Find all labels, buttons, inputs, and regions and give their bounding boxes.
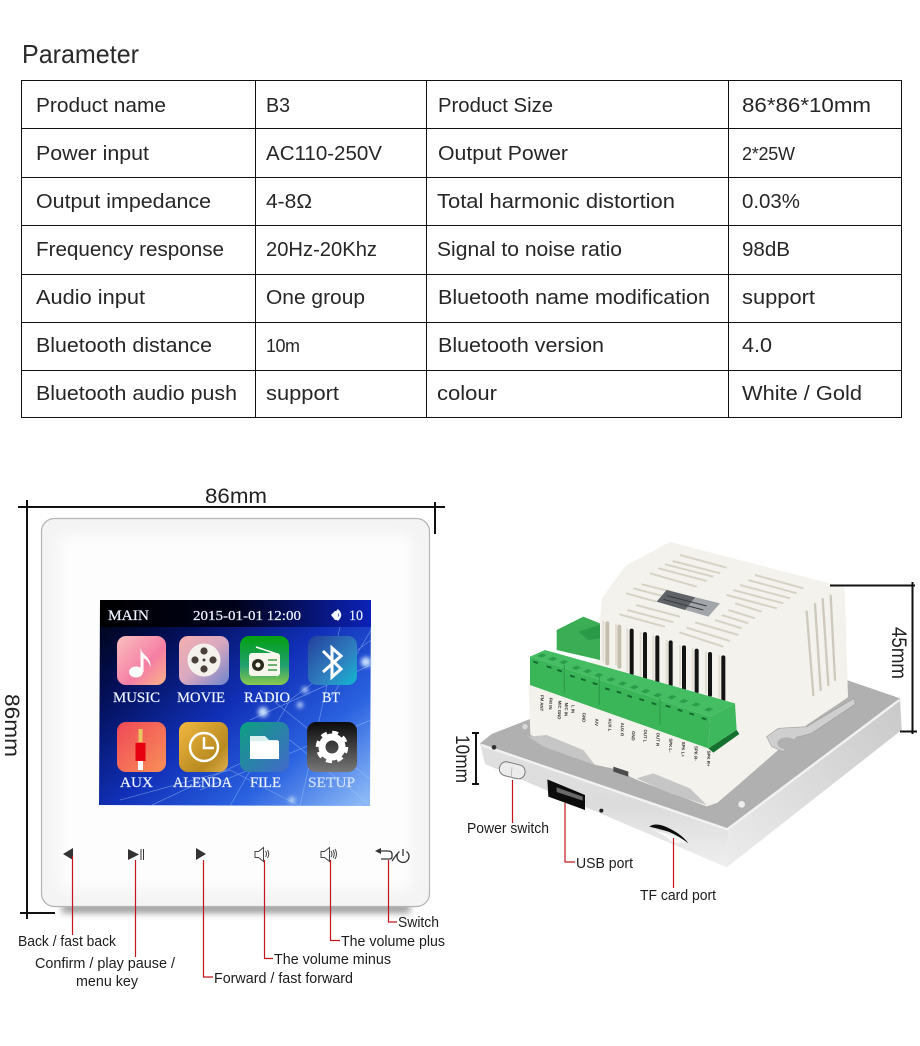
top vent slots: [619, 555, 803, 647]
row: bluetooth distance: Bluetooth version: [438, 335, 604, 357]
parameter table: [22, 80, 902, 418]
icon: music: [117, 636, 166, 685]
row: bluetooth audio push: colour: [437, 383, 497, 405]
label: calendar: ALENDA: [173, 775, 232, 791]
white housing: [530, 543, 847, 805]
side vent gaps: [607, 623, 723, 700]
row: bluetooth audio push: [36, 383, 862, 405]
row: audio input: Audio input: [36, 287, 145, 309]
label: radio: RADIO: [244, 690, 290, 706]
callout: confirm / play pause: Confirm / play pause /: [35, 955, 176, 972]
row: frequency response: [36, 239, 790, 261]
row: product name: B3: [266, 95, 290, 117]
row: product name: [36, 95, 871, 117]
row: power input: Power input: [36, 143, 149, 165]
row: power input: 2*25W: [742, 144, 795, 164]
label: setup: SETUP: [308, 775, 355, 791]
callout: the volume minus: [264, 860, 391, 968]
callout: confirm / play pause: menu key: [76, 973, 138, 990]
terminal labels: MIC GND: [557, 701, 562, 720]
row: output impedance: Total harmonic distortion: [437, 191, 675, 213]
screen: [99, 600, 371, 806]
icon: calendar: [179, 722, 228, 772]
terminal labels: GND: [631, 731, 636, 741]
row: product name: Product name: [36, 95, 166, 117]
dimension: 86mm height: 86mm: [0, 694, 23, 757]
icon: setup: [307, 722, 357, 772]
row: frequency response: 98dB: [742, 239, 790, 261]
terminal labels: L IN: [570, 705, 576, 713]
callout: back / fast back: [18, 856, 116, 950]
flange pieces: [528, 698, 855, 805]
row: bluetooth distance: Bluetooth distance: [36, 335, 212, 357]
panel: front view of device: [42, 518, 430, 913]
row: bluetooth distance: 4.0: [742, 335, 772, 357]
silver base plate: [480, 680, 902, 867]
tf card slot: [649, 825, 688, 843]
white front plate: [42, 518, 430, 906]
indicator hole: [599, 809, 603, 813]
row: frequency response: 20Hz-20Khz: [266, 239, 377, 261]
right vents: [807, 596, 835, 695]
terminal labels: [539, 695, 711, 767]
terminal labels: AUX L: [607, 718, 613, 732]
callout: confirm / play pause: [35, 860, 176, 990]
row: audio input: support: [742, 287, 815, 309]
row: bluetooth audio push: Bluetooth audio push: [36, 383, 237, 405]
dimension: 86mm width: [18, 485, 445, 534]
icon: volume plus: [321, 848, 336, 862]
icon: volume minus: [255, 848, 269, 862]
row: output impedance: 0.03%: [742, 191, 800, 213]
terminal labels: OUT R: [655, 733, 661, 747]
terminal labels: SPK R-: [693, 746, 699, 761]
terminal labels: MIC IN: [564, 703, 569, 716]
terminal labels: FM ANT: [539, 695, 545, 712]
row: frequency response: Signal to noise ratio: [437, 239, 622, 261]
large green terminal: [557, 617, 600, 660]
terminal front pockets: [533, 661, 706, 720]
label: music: MUSIC: [113, 690, 160, 706]
row: output impedance: Output impedance: [36, 191, 211, 213]
callout: the volume plus: [330, 860, 445, 950]
row: audio input: Bluetooth name modification: [438, 287, 710, 309]
dimension: 45mm height: [830, 582, 917, 734]
terminal labels: SPK L+: [680, 742, 686, 758]
callout: tf card port: TF card port: [640, 887, 717, 904]
row: power input: AC110-250V: [266, 143, 383, 165]
icon: radio: [240, 636, 289, 685]
dimension: 10mm depth: [451, 733, 479, 784]
icon: forward: [196, 848, 206, 860]
fin shading: [603, 621, 719, 698]
device shadow: [62, 904, 410, 913]
callout: forward / fast forward: Forward / fast forward: [214, 970, 353, 987]
dimension: 10mm depth: 10mm: [451, 735, 472, 783]
row: output impedance: 4-8Ω: [266, 191, 312, 213]
icon: play pause: [128, 849, 144, 860]
label: movie: MOVIE: [177, 690, 225, 706]
row: bluetooth audio push: White / Gold: [742, 383, 862, 405]
button row icons: [63, 848, 409, 862]
terminal labels: AUX R: [619, 723, 625, 737]
callout: usb port: [565, 803, 634, 872]
dimension: 86mm height: [0, 500, 55, 919]
label: aux: AUX: [120, 775, 153, 791]
screen network pattern: [120, 627, 371, 806]
label: bluetooth: BT: [322, 690, 340, 706]
row: power input: [36, 143, 795, 165]
green terminal block: [530, 650, 739, 753]
status bar text: 10: [349, 608, 363, 624]
usb port: [547, 779, 585, 810]
icon: file: [240, 722, 289, 772]
row: audio input: [36, 287, 815, 309]
row: bluetooth audio push: support: [266, 383, 339, 405]
terminal labels: SPK L-: [668, 738, 673, 753]
icon: aux: [117, 722, 166, 772]
terminal labels: SPK R+: [706, 751, 711, 767]
dimension: 86mm width: 86mm: [205, 485, 267, 508]
rating label sticker: [657, 590, 720, 617]
terminal labels: GND: [581, 713, 587, 722]
status bar text: MAIN: [108, 608, 149, 624]
row: product name: Product Size: [438, 95, 553, 117]
terminal labels: A/V: [594, 719, 599, 726]
row: output impedance: [36, 191, 800, 213]
row: audio input: One group: [266, 287, 365, 309]
row: bluetooth distance: 10m: [266, 336, 300, 356]
terminal top sockets: [537, 653, 713, 712]
row: frequency response: Frequency response: [36, 239, 224, 261]
dimension: 45mm height: 45mm: [887, 627, 910, 679]
callout: the volume minus: The volume minus: [274, 951, 391, 968]
panel: rear view of device: [480, 543, 902, 867]
icon: back: [63, 848, 73, 860]
power switch: [498, 760, 527, 780]
screen light spots: [258, 657, 371, 803]
callout: switch: [388, 860, 439, 931]
row: product name: 86*86*10mm: [742, 95, 871, 117]
label: file: FILE: [250, 775, 281, 791]
callout: tf card port: [640, 838, 717, 904]
callout: forward / fast forward: [204, 860, 353, 987]
icon: movie: [179, 636, 229, 685]
title: Parameter: [22, 39, 139, 69]
icon: return and power: [375, 848, 409, 862]
callout: usb port: USB port: [576, 855, 634, 872]
callout: power switch: Power switch: [467, 820, 549, 837]
row: bluetooth distance: [36, 335, 772, 357]
status bar text: 2015-01-01 12:00: [193, 609, 301, 624]
status bar text: [108, 608, 363, 624]
row: power input: Output Power: [438, 143, 568, 165]
terminal labels: OUT L: [643, 729, 648, 743]
callout: the volume plus: The volume plus: [341, 933, 445, 950]
callout: back / fast back: Back / fast back: [18, 933, 116, 950]
callout: switch: Switch: [398, 914, 439, 931]
icon: bluetooth: [308, 636, 357, 685]
terminal labels: FM IN: [548, 698, 553, 710]
callout: power switch: [467, 780, 549, 837]
